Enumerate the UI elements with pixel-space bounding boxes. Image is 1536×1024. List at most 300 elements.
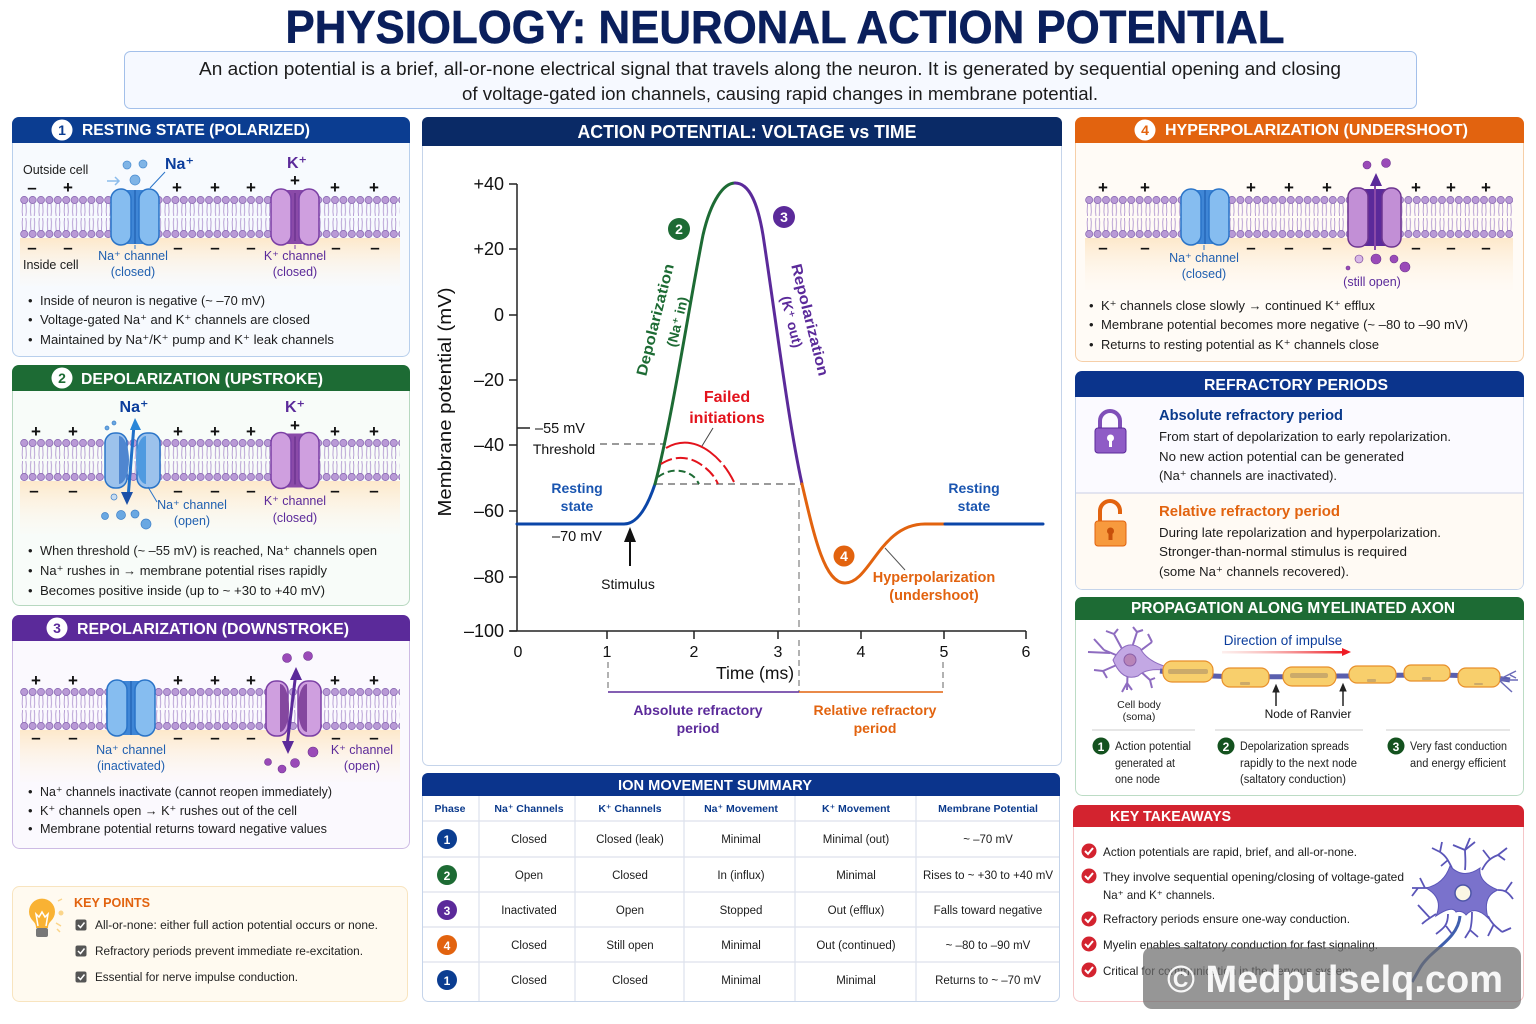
bullets: K⁺ channels close slowly → continued K⁺ efflux [1101,298,1375,313]
subtitle box [124,52,1416,108]
K channel open [266,681,321,736]
list: All-or-none: either full action potential occurs or none. [95,920,378,932]
membrane diagram: + [31,422,41,441]
step 2: (saltatory conduction) [1240,774,1346,786]
Na channel open [105,433,160,488]
badge 4: 4 [1141,122,1149,138]
Na channel inactivated [107,680,155,736]
phase badges: 4 [840,548,848,564]
curve labels: Threshold [533,441,595,457]
step 3: Very fast conduction [1410,741,1507,753]
list [76,920,378,984]
membrane diagram: Inside cell [23,258,79,272]
row 4: Out (continued) [816,940,896,952]
y axis [435,174,530,641]
membrane diagram: – [1284,238,1294,257]
row 3: 3 [444,904,451,918]
membrane diagram: + [330,422,340,441]
K channel still open [1348,173,1401,250]
bullets: Returns to resting potential as K⁺ channels close [1101,337,1379,352]
failed initiations [658,389,765,484]
membrane diagram: – [1481,238,1491,257]
membrane diagram: + [330,178,340,197]
row 3 [437,900,1042,920]
membrane diagram: + [330,671,340,690]
step 1: generated at [1115,758,1176,770]
guide lines [600,444,802,630]
curve labels: state [958,498,991,514]
y axis: +20 [473,239,504,259]
header row: Na⁺ Movement [704,803,778,815]
bullets: Maintained by Na⁺/K⁺ pump and K⁺ leak channels [40,332,334,347]
membrane diagram: + [246,178,256,197]
heading: DEPOLARIZATION (UPSTROKE) [81,371,323,388]
takeaway text: They involve sequential opening/closing of voltage-gated [1103,870,1404,884]
membrane diagram: + [290,416,300,435]
heading: HYPERPOLARIZATION (UNDERSHOOT) [1165,122,1468,139]
heading: REPOLARIZATION (DOWNSTROKE) [77,621,349,638]
bullets: • [28,563,33,578]
membrane diagram: – [246,728,256,747]
bullets: • [28,293,33,308]
membrane diagram: + [172,178,182,197]
membrane diagram: Na⁺ channel [157,498,227,512]
checks [1082,844,1096,978]
bullets: • [1089,298,1094,313]
membrane diagram: + [173,422,183,441]
bullets: • [28,821,33,836]
membrane diagram: + [1284,178,1294,197]
row 5: Returns to ~ –70 mV [935,975,1041,987]
row 2 [437,865,1053,885]
membrane diagram: (open) [344,759,380,773]
badge 1 [52,120,72,140]
x axis: 3 [774,644,783,661]
membrane diagram: (still open) [1343,275,1401,289]
membrane diagram: K⁺ channel [331,743,393,757]
membrane diagram: – [246,238,256,257]
panel: key takeaways [1073,805,1524,1002]
step 2: 2 [1223,740,1230,754]
row 2: Open [515,870,543,882]
y axis: –60 [474,501,504,521]
membrane diagram: – [370,238,380,257]
heading: RESTING STATE (POLARIZED) [82,122,310,139]
header row: K⁺ Movement [822,803,890,815]
axon: Node of Ranvier [1265,707,1351,721]
membrane diagram: – [1411,238,1421,257]
membrane diagram: – [331,728,341,747]
ions [264,652,318,773]
row 4: 4 [444,939,451,953]
row 5: Closed [612,975,648,987]
membrane diagram: + [290,171,300,190]
membrane diagram: + [1246,178,1256,197]
bullets: Membrane potential becomes more negative (~ –80 to –90 mV) [1101,317,1468,332]
membrane diagram: – [1140,238,1150,257]
absolute text: From start of depolarization to early repolarization. [1159,429,1451,444]
axon: (soma) [1123,711,1155,723]
step 3 [1388,738,1507,770]
heading: REFRACTORY PERIODS [1204,377,1388,394]
membrane diagram: – [29,481,39,500]
bullets [28,784,332,836]
membrane diagram [20,652,400,782]
badge 2: 2 [58,370,66,386]
grid [423,796,1059,1001]
step 1: Action potential [1115,741,1191,753]
row 2: Rises to ~ +30 to +40 mV [923,870,1053,882]
bullets: • [28,784,33,799]
takeaway text: Critical for communication in the nervous system. [1103,964,1355,978]
row 2: Minimal [836,870,876,882]
node arrows [1273,684,1346,706]
membrane diagram: + [369,671,379,690]
membrane diagram: – [1446,238,1456,257]
curve labels: (undershoot) [889,588,979,604]
axon [1088,627,1518,723]
step 2: Depolarization spreads [1240,741,1349,753]
bullets: Membrane potential returns toward negative values [40,821,327,836]
watermark: © Medpulselq.com [1167,959,1503,1001]
curve labels: –70 mV [552,529,602,545]
membrane diagram: + [246,671,256,690]
curve labels: Hyperpolarization [873,570,995,586]
membrane diagram: – [1246,238,1256,257]
membrane diagram: + [173,671,183,690]
curve labels: Resting [948,480,1000,496]
badge 2 [52,368,72,388]
badge 3 [46,618,68,638]
bullets: Na⁺ rushes in → membrane potential rises rapidly [40,563,327,578]
icon: closed lock [1095,411,1126,453]
membrane diagram: + [246,422,256,441]
curve labels: (K⁺ out) [778,294,806,349]
y axis: –100 [464,621,504,641]
watermark [1143,947,1521,1009]
row 4: Still open [606,940,654,952]
membrane diagram: + [1322,178,1332,197]
y axis: –20 [474,370,504,390]
panel: propagation [1075,597,1524,796]
refractory bar: period [677,720,719,736]
list: Refractory periods prevent immediate re-excitation. [95,946,363,958]
row 5 [437,970,1041,990]
membrane diagram: K⁺ channel [264,249,326,263]
axon: Cell body [1117,699,1162,711]
membrane diagram: K⁺ [285,399,305,416]
membrane diagram: – [369,481,379,500]
membrane diagram: + [210,671,220,690]
curve labels: state [561,498,594,514]
arrow [121,418,141,505]
membrane diagram: (closed) [111,265,155,279]
badge 3: 3 [53,620,61,636]
row 5: Closed [511,975,547,987]
membrane diagram: – [331,238,341,257]
membrane diagram: – [68,481,78,500]
phase badges: 3 [780,209,788,225]
membrane diagram: – [246,481,256,500]
row 5: 1 [444,974,451,988]
step 2: rapidly to the next node [1240,758,1357,770]
x axis: 2 [690,644,699,661]
heading: PROPAGATION ALONG MYELINATED AXON [1131,600,1455,617]
panel: key points [12,886,408,1002]
membrane diagram: – [210,238,220,257]
membrane diagram: – [173,728,183,747]
panel: action potential chart [422,117,1062,766]
heading: ACTION POTENTIAL: VOLTAGE vs TIME [578,122,916,142]
relative text: (some Na⁺ channels recovered). [1159,564,1349,579]
badge 4 [1134,120,1156,140]
membrane diagram: + [210,422,220,441]
relative text: Relative refractory period [1159,503,1340,520]
membrane diagram: – [173,481,183,500]
icon: neuron [1412,838,1513,982]
bullets: • [28,312,33,327]
membrane diagram: + [1481,178,1491,197]
bullets [28,293,334,347]
step 3: and energy efficient [1410,758,1507,770]
bullets: Inside of neuron is negative (~ –70 mV) [40,293,265,308]
bullets: Voltage-gated Na⁺ and K⁺ channels are closed [40,312,310,327]
y axis: 0 [494,305,504,325]
header row [435,803,1038,815]
row 3: Inactivated [501,905,557,917]
membrane diagram: Na⁺ channel [98,249,168,263]
bullets: • [28,583,33,598]
membrane diagram: – [31,728,41,747]
row 3: Open [616,905,644,917]
bullets [28,543,377,598]
bullets: • [28,803,33,818]
membrane diagram: – [173,238,183,257]
curve labels: Repolarization [787,262,832,378]
step 2 [1218,738,1357,786]
bullets: K⁺ channels open → K⁺ rushes out of the cell [40,803,297,818]
curve labels: Stimulus [601,576,655,592]
x axis: 5 [940,644,949,661]
membrane diagram: (closed) [1182,267,1226,281]
membrane diagram: – [210,481,220,500]
refractory bar [608,640,943,736]
membrane diagram: + [68,422,78,441]
subtitle box: An action potential is a brief, all-or-none electrical signal that travels along the neuron. It is generated by sequential opening and closing [199,58,1341,79]
curve labels [533,262,1000,604]
row 1: ~ –70 mV [963,834,1013,846]
y axis: –80 [474,567,504,587]
membrane diagram: – [210,728,220,747]
membrane diagram: + [1098,178,1108,197]
icon: open lock [1095,501,1126,546]
membrane diagram: K⁺ channel [264,494,326,508]
membrane diagram: + [369,422,379,441]
absolute text [1159,407,1451,483]
phase badges [668,206,854,566]
membrane diagram: Outside cell [23,163,88,177]
neuron soma [1088,627,1155,692]
curve labels: –55 mV [535,421,585,437]
step 1: one node [1115,774,1160,786]
membrane diagram: Na⁺ channel [1169,251,1239,265]
row 1: 1 [444,833,451,847]
membrane diagram: Na⁺ [165,156,194,173]
header row: Membrane Potential [938,803,1038,815]
panel: hyperpolarization [1075,117,1524,362]
membrane diagram: – [1098,238,1108,257]
row 5: Minimal [721,975,761,987]
y axis: –40 [474,435,504,455]
takeaway text: Na⁺ and K⁺ channels. [1103,888,1215,902]
membrane diagram: + [68,671,78,690]
membrane diagram [1085,158,1513,290]
x axis: 1 [603,644,612,661]
membrane diagram: (inactivated) [97,759,165,773]
membrane diagram: – [369,728,379,747]
bullets: • [28,332,33,347]
relative text: Stronger-than-normal stimulus is required [1159,544,1407,559]
icon: light bulb [29,899,64,937]
relative text: During late repolarization and hyperpolarization. [1159,525,1441,540]
row 3: Falls toward negative [934,905,1042,917]
membrane diagram: – [27,178,37,197]
axon core [1160,671,1510,680]
row 2: In (influx) [717,870,765,882]
bullets: Becomes positive inside (up to ~ +30 to +40 mV) [40,583,325,598]
header row: Na⁺ Channels [494,803,564,815]
takeaway text: Action potentials are rapid, brief, and all-or-none. [1103,845,1357,859]
myelin segments [1163,661,1500,687]
heading: KEY TAKEAWAYS [1110,808,1231,825]
row 2: Closed [612,870,648,882]
absolute text: No new action potential can be generated [1159,449,1404,464]
table: ion movement summary [422,773,1060,1002]
row 4: Closed [511,940,547,952]
heading: ION MOVEMENT SUMMARY [618,778,812,794]
membrane diagram: – [68,728,78,747]
row 1: Closed [511,834,547,846]
membrane diagram: – [1322,238,1332,257]
membrane diagram: Na⁺ channel [96,743,166,757]
list: Essential for nerve impulse conduction. [95,972,298,984]
membrane diagram: – [330,481,340,500]
row 2: 2 [444,869,451,883]
refractory bar: Absolute refractory [633,702,763,718]
row 1: Minimal [721,834,761,846]
x axis: 6 [1022,644,1031,661]
membrane diagram: + [63,178,73,197]
row 1: Closed (leak) [596,834,664,846]
membrane diagram: + [210,178,220,197]
takeaway text [1103,845,1404,978]
x axis: 4 [857,644,866,661]
Na ions [123,160,147,185]
curve labels: Depolarization [633,262,678,378]
absolute text: Absolute refractory period [1159,407,1343,424]
membrane diagram: (open) [174,514,210,528]
direction arrow [1222,648,1351,656]
stimulus arrow [624,527,636,566]
row 4: ~ –80 to –90 mV [946,940,1031,952]
refractory bar: Relative refractory [814,702,937,718]
panel: resting state [12,117,410,356]
ions [102,421,151,529]
ions [1346,158,1410,272]
step 1 [1092,738,1191,786]
step 1: 1 [1098,740,1105,754]
bullets: • [1089,317,1094,332]
row 1 [437,829,1013,849]
refractory bar: period [854,720,896,736]
membrane diagram [20,399,400,534]
panel: refractory periods [1075,371,1524,590]
curve labels: Resting [551,480,603,496]
takeaway text: Refractory periods ensure one-way conduction. [1103,912,1350,926]
Na channel [111,189,159,245]
bullets: • [1089,337,1094,352]
panel: repolarization [12,615,410,848]
bullets: • [28,543,33,558]
action potential curve [517,183,1043,583]
membrane diagram: + [31,671,41,690]
step 3: 3 [1393,740,1400,754]
membrane diagram: (closed) [273,265,317,279]
bullets: When threshold (~ –55 mV) is reached, Na⁺ channels open [40,543,377,558]
y axis: +40 [473,174,504,194]
arrow [282,667,302,754]
membrane diagram: K⁺ [287,155,307,172]
row 5: Minimal [836,975,876,987]
bullets: Na⁺ channels inactivate (cannot reopen immediately) [40,784,332,799]
relative text [1159,503,1441,579]
membrane diagram [20,155,400,286]
phase badges: 2 [675,221,683,237]
title: PHYSIOLOGY: NEURONAL ACTION POTENTIAL [286,1,1284,53]
x axis [510,631,1031,683]
row 4 [437,935,1031,955]
takeaway text: Myelin enables saltatory conduction for fast signaling. [1103,938,1378,952]
membrane diagram: + [1446,178,1456,197]
failed initiations: initiations [689,410,765,427]
x axis: 0 [514,644,523,661]
membrane diagram: + [369,178,379,197]
curve labels: (Na⁺ in) [663,295,691,348]
badge 1: 1 [58,122,66,138]
subtitle box: of voltage-gated ion channels, causing rapid changes in membrane potential. [462,83,1098,104]
panel: depolarization [12,365,410,606]
membrane diagram: (closed) [273,511,317,525]
header row: K⁺ Channels [598,803,662,815]
direction label: Direction of impulse [1224,633,1342,648]
membrane diagram: Na⁺ [120,399,148,416]
membrane diagram: – [27,238,37,257]
row 3: Out (efflux) [828,905,885,917]
Na channel [1181,189,1229,245]
membrane diagram: + [1140,178,1150,197]
K channel [271,432,319,488]
row 4: Minimal [721,940,761,952]
membrane diagram: – [63,238,73,257]
absolute text: (Na⁺ channels are inactivated). [1159,468,1337,483]
heading: KEY POINTS [74,895,150,910]
membrane diagram: + [1411,178,1421,197]
failed initiations: Failed [704,389,750,406]
x axis: Time (ms) [716,663,794,683]
row 1: Minimal (out) [823,834,889,846]
y axis: Membrane potential (mV) [435,288,455,516]
header row: Phase [435,803,466,815]
